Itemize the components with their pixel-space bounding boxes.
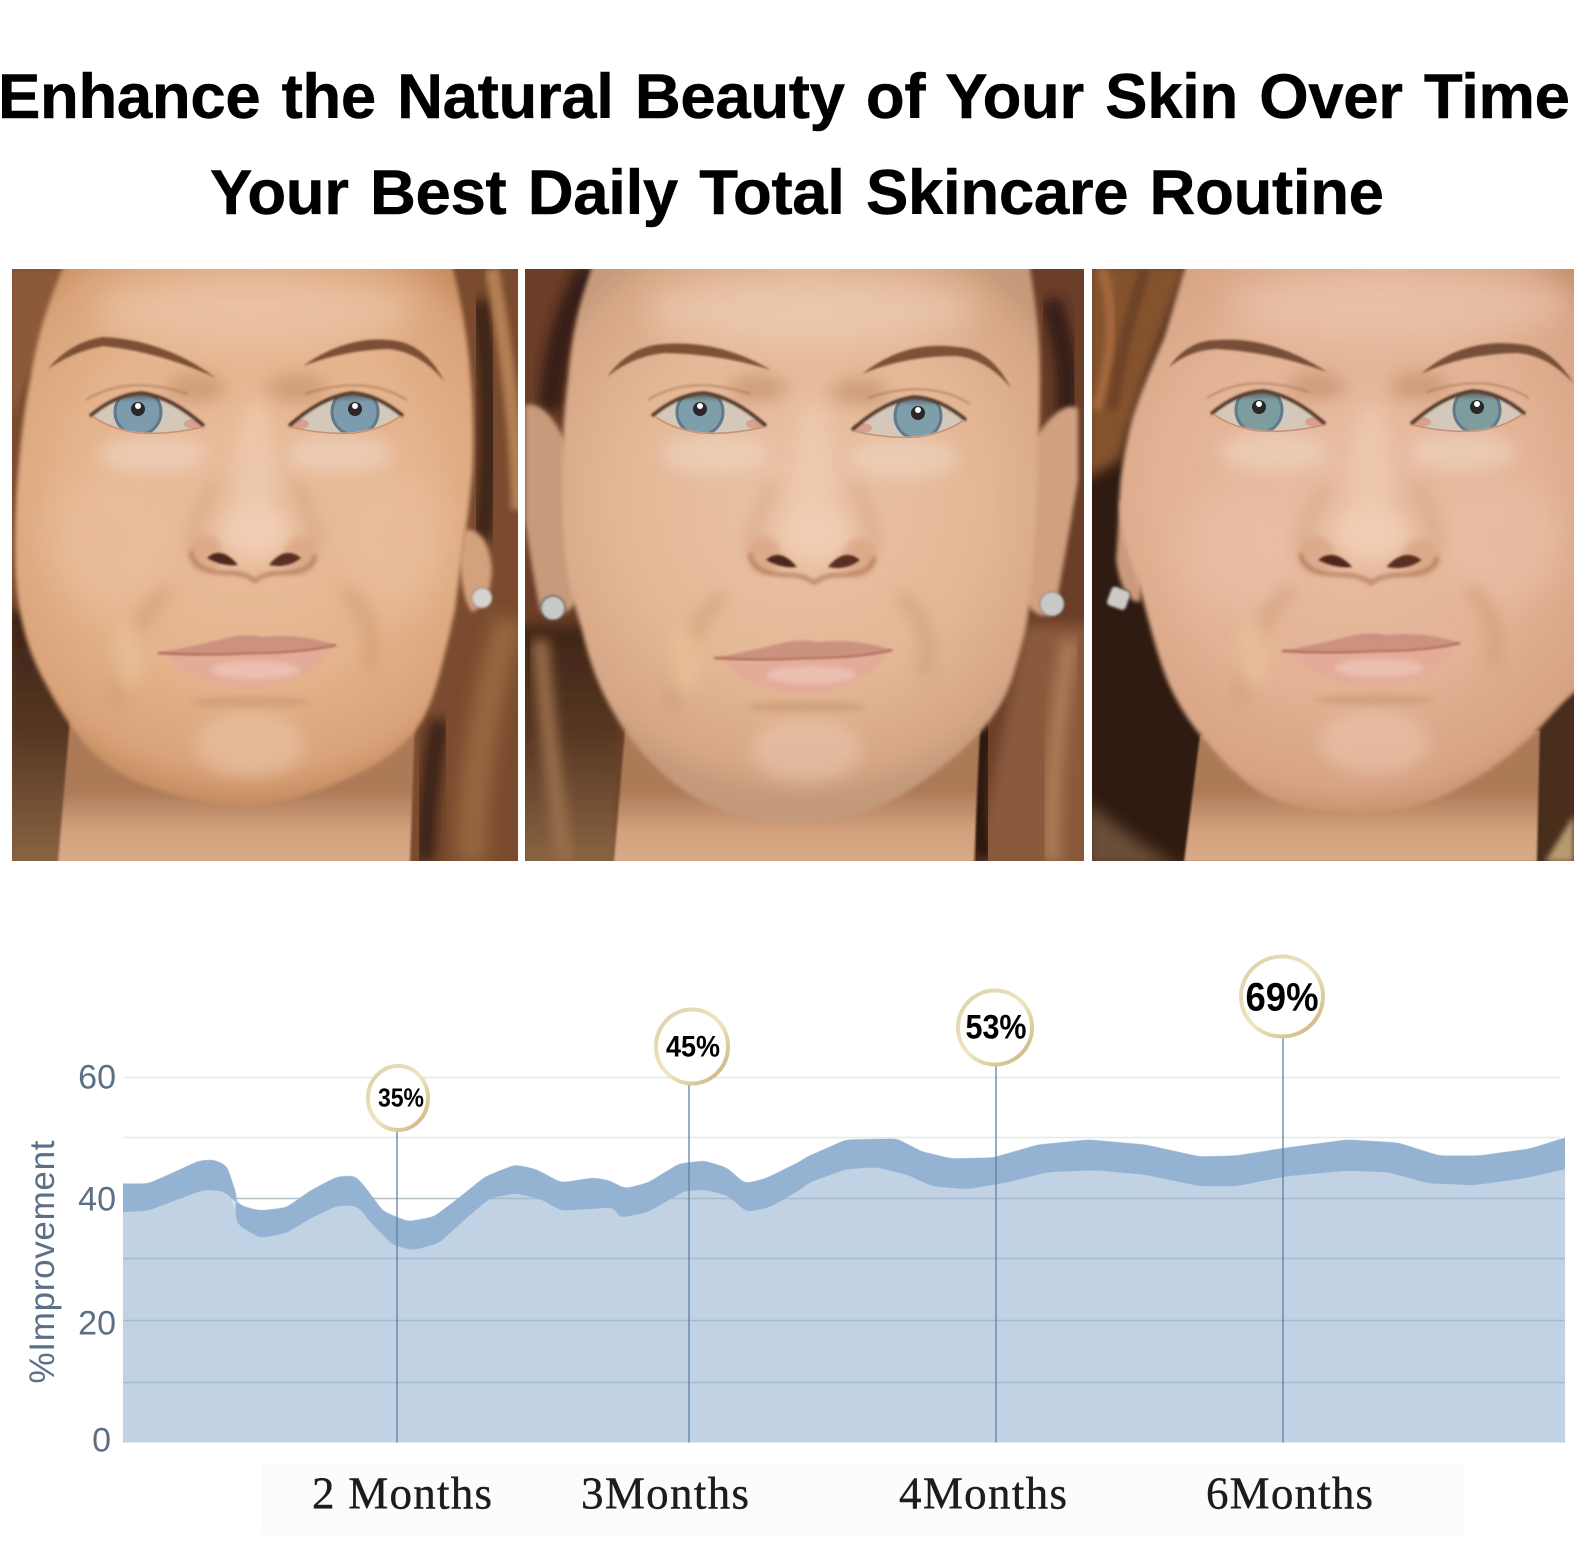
y axis title: %Improvement	[23, 1140, 62, 1384]
panel: face photo, after	[1085, 262, 1574, 870]
right eyebrow	[1421, 343, 1574, 384]
marker: 45%: 45%	[666, 1030, 720, 1064]
title line 2: Your Best Daily Total Skincare Routine	[210, 158, 1384, 228]
mouth	[1238, 588, 1495, 775]
y axis tick labels: 60	[78, 1058, 116, 1096]
right eyebrow	[862, 346, 1011, 388]
x axis labels: 3Months	[581, 1468, 749, 1518]
icon: earring	[1106, 585, 1131, 611]
left eyebrow	[607, 344, 771, 377]
marker stems	[397, 1036, 1283, 1442]
left eye	[1207, 372, 1347, 472]
y axis tick labels: 0	[92, 1422, 111, 1460]
panel: face photo, before	[6, 262, 518, 870]
marker: 45%	[656, 1010, 728, 1084]
mouth	[114, 590, 371, 777]
chart: improvement over time	[23, 956, 1574, 1536]
x axis labels: 4Months	[899, 1468, 1067, 1518]
marker: 35%	[368, 1066, 428, 1130]
y axis tick labels: 40	[78, 1180, 116, 1218]
x axis labels	[312, 1468, 1373, 1518]
panel: face photo, mid treatment	[518, 262, 1090, 870]
marker: 35%: 35%	[378, 1082, 424, 1112]
icon: earring	[472, 588, 492, 608]
icon: earring right	[1040, 592, 1064, 616]
area fill	[108, 1166, 1574, 1458]
lower grid lines	[123, 1198, 1565, 1382]
title line 1: Enhance the Natural Beauty of Your Skin Over Time	[0, 62, 1570, 132]
right eye	[267, 374, 407, 474]
marker: 53%: 53%	[966, 1008, 1026, 1046]
y axis tick labels: 20	[78, 1304, 116, 1342]
ribbon band	[108, 1132, 1574, 1250]
right eye	[1389, 372, 1529, 472]
marker: 69%	[1241, 956, 1323, 1036]
marker: 69%: 69%	[1246, 976, 1318, 1020]
marker: 53%	[958, 990, 1032, 1064]
x axis labels: 2 Months	[312, 1468, 492, 1518]
left eye	[86, 374, 226, 474]
icon: earring left	[541, 596, 565, 620]
y axis tick labels	[78, 1058, 116, 1460]
title	[0, 62, 1570, 228]
left eyebrow	[48, 337, 216, 378]
upper grid lines	[124, 1078, 1560, 1138]
x axis labels: 6Months	[1206, 1468, 1373, 1518]
mouth	[670, 595, 927, 782]
left eyebrow	[1169, 340, 1327, 372]
right eyebrow	[303, 340, 444, 381]
x label backdrop	[262, 1464, 1464, 1536]
right eye	[830, 378, 970, 478]
left eye	[648, 374, 788, 474]
